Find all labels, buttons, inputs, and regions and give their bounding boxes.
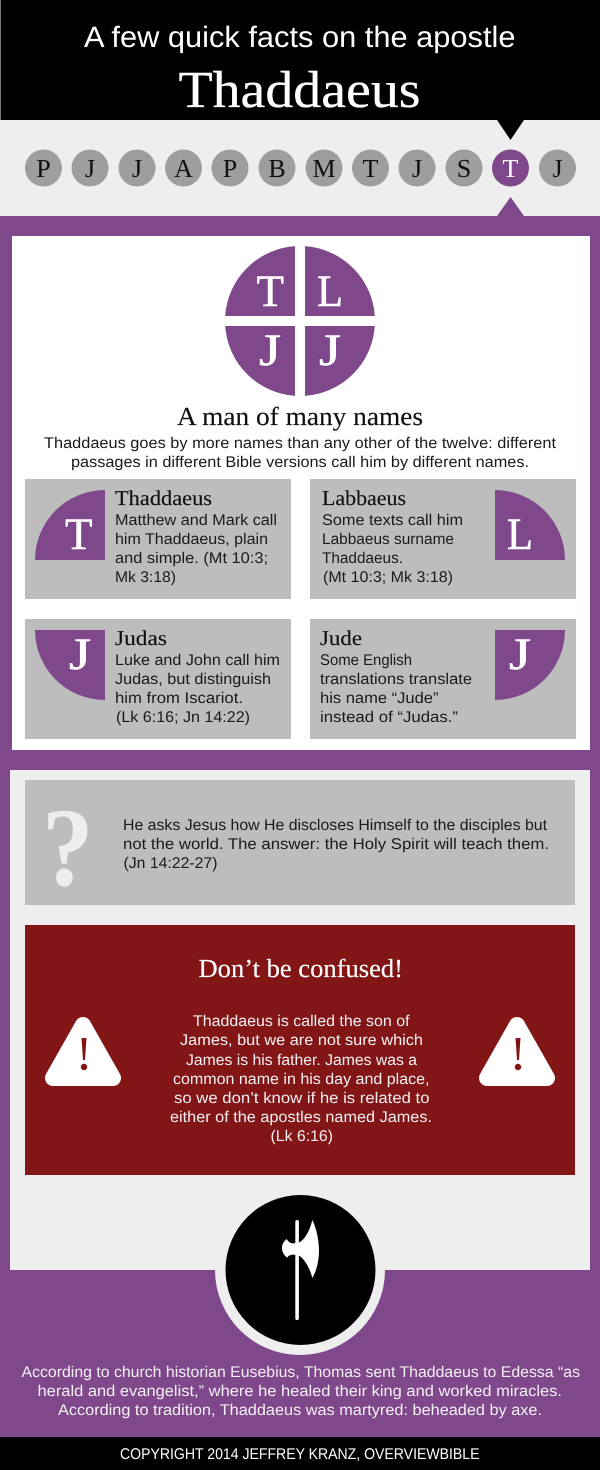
question text: not the world. The answer: the Holy Spirit will teach them. — [123, 836, 549, 853]
heading: A man of many names — [177, 402, 423, 431]
card: Jude: instead of “Judas.” — [320, 709, 458, 726]
warning text: (Lk 6:16) — [270, 1128, 333, 1145]
callout: don't be confused — [25, 925, 575, 1175]
card: Judas: J — [69, 629, 91, 679]
apostle selector row: J — [412, 154, 422, 183]
card: Jude: Jude — [320, 626, 362, 650]
icon: four-part name circle: J — [319, 325, 341, 375]
card: Judas: Judas — [115, 626, 167, 650]
question text: (Jn 14:22-27) — [124, 855, 218, 872]
card: Thaddaeus: and simple. (Mt 10:3; — [115, 550, 268, 567]
apostle selector row: S — [457, 154, 471, 183]
card: Thaddaeus: him Thaddaeus, plain — [115, 531, 268, 548]
card: Judas: Luke and John call him — [115, 652, 280, 669]
card: Labbaeus: L — [507, 509, 533, 559]
card: Labbaeus: Thaddaeus. — [322, 550, 403, 567]
icon: four-part name circle: T — [256, 266, 284, 316]
icon: right warning triangle — [487, 1025, 547, 1078]
closing text: According to tradition, Thaddaeus was martyred: beheaded by axe. — [58, 1402, 542, 1419]
card: Labbaeus: (Mt 10:3; Mk 3:18) — [323, 569, 453, 586]
icon: axe medallion — [215, 1185, 385, 1355]
card: Jude: Some English — [320, 652, 412, 669]
card: Jude: J — [509, 629, 531, 679]
card: Jude: translations translate — [320, 671, 472, 688]
header banner — [0, 0, 600, 140]
apostle selector row: M — [312, 154, 336, 183]
card: Labbaeus: Some texts call him — [322, 512, 463, 529]
footer — [0, 1437, 600, 1470]
apostle selector row: J — [132, 154, 142, 183]
closing text: herald and evangelist,” where he healed their king and worked miracles. — [38, 1383, 562, 1400]
panel: a man of many names — [12, 236, 590, 750]
warning text: James is his father. James was a — [186, 1052, 417, 1069]
card: Labbaeus: Labbaeus surname — [322, 531, 454, 548]
closing text: According to church historian Eusebius, Thomas sent Thaddaeus to Edessa “as — [22, 1364, 580, 1381]
warning text — [170, 1013, 432, 1145]
card: Thaddaeus: Mk 3:18) — [115, 569, 176, 586]
card: Jude: his name “Jude” — [320, 690, 438, 707]
apostle selector row — [25, 150, 576, 186]
card: Jude — [310, 619, 576, 739]
callout: question box — [25, 780, 575, 910]
card: Labbaeus: Labbaeus — [322, 486, 406, 510]
apostle selector row: T — [363, 154, 379, 183]
apostle selector row: J — [552, 154, 563, 183]
question text — [123, 817, 549, 872]
card: Thaddaeus — [25, 479, 291, 599]
apostle selector row: J — [85, 154, 95, 183]
apostle selector row: P — [36, 154, 51, 183]
panel: light section — [10, 770, 590, 1270]
apostle selector row: B — [268, 154, 286, 183]
apostle selector row: A — [174, 154, 193, 183]
icon: four-part name circle: J — [259, 325, 281, 375]
warning text: so we don’t know if he is related to — [174, 1090, 430, 1107]
card: Thaddaeus: T — [65, 509, 92, 559]
warning text: Thaddaeus is called the son of — [193, 1013, 410, 1030]
warning text: either of the apostles named James. — [170, 1109, 432, 1126]
icon: four-part name circle — [225, 246, 375, 396]
red box heading: Don’t be confused! — [198, 954, 403, 983]
card: Judas — [25, 619, 291, 739]
warning text: James, but we are not sure which — [180, 1032, 423, 1049]
intro text — [44, 435, 557, 471]
purple pointer — [497, 197, 524, 216]
question text: He asks Jesus how He discloses Himself to the disciples but — [123, 817, 548, 834]
closing text — [22, 1364, 580, 1419]
card: Thaddaeus: Thaddaeus — [115, 486, 212, 510]
card: Judas: him from Iscariot. — [115, 690, 243, 707]
icon: four-part name circle: L — [317, 266, 343, 316]
apostle selector row: P — [223, 154, 237, 183]
title name: Thaddaeus — [178, 62, 420, 119]
card: Judas: (Lk 6:16; Jn 14:22) — [116, 709, 250, 726]
intro text: passages in different Bible versions call him by different names. — [71, 454, 529, 471]
card: Thaddaeus: Matthew and Mark call — [115, 512, 277, 529]
footer: COPYRIGHT 2014 JEFFREY KRANZ, OVERVIEWBIBLE — [120, 1446, 480, 1463]
card: Labbaeus — [310, 479, 576, 599]
icon: question mark: ? — [42, 786, 94, 910]
intro text: Thaddaeus goes by more names than any other of the twelve: different — [44, 435, 557, 452]
warning text: common name in his day and place, — [173, 1071, 430, 1088]
icon: left warning triangle — [53, 1025, 113, 1078]
title line: A few quick facts on the apostle — [84, 21, 516, 54]
card: Judas: Judas, but distinguish — [115, 671, 271, 688]
apostle selector row: T — [503, 154, 519, 183]
